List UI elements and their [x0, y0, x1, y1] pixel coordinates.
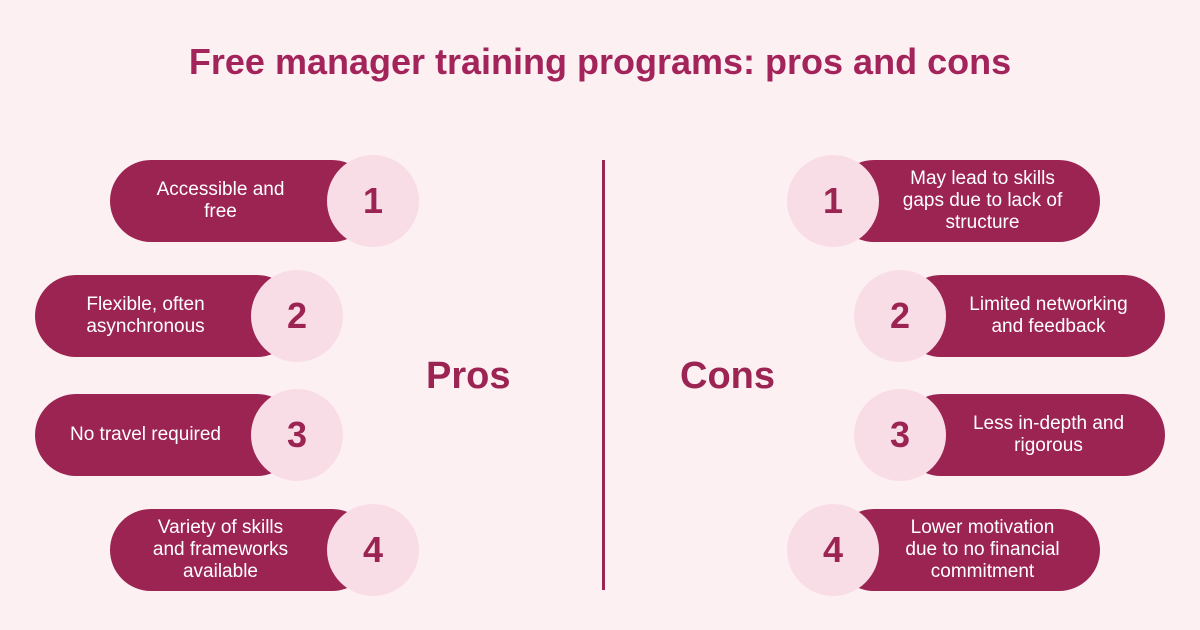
- con 3: [854, 389, 1165, 481]
- pro 1: Accessible and: [157, 179, 284, 200]
- pro 2: asynchronous: [86, 316, 205, 337]
- con 1: May lead to skills: [910, 168, 1055, 189]
- pro 2: 2: [287, 295, 307, 336]
- pro 1: 1: [363, 180, 383, 221]
- pro 4: and frameworks: [153, 539, 288, 560]
- title: Free manager training programs: pros and cons: [189, 41, 1011, 82]
- con 2: Limited networking: [969, 294, 1128, 315]
- pro 2: [35, 270, 343, 362]
- cons label: Cons: [680, 355, 775, 397]
- con 1: structure: [946, 212, 1019, 233]
- pro 2: Flexible, often: [86, 294, 205, 315]
- pro 1: [110, 155, 419, 247]
- con 1: [787, 155, 1100, 247]
- con 2: and feedback: [991, 316, 1106, 337]
- con 4: due to no financial: [905, 539, 1060, 560]
- pro 4: Variety of skills: [158, 517, 283, 538]
- con 3: Less in-depth and: [973, 413, 1124, 434]
- pro 4: [110, 504, 419, 596]
- con 2: 2: [890, 295, 910, 336]
- divider: [602, 160, 605, 590]
- con 1: 1: [823, 180, 843, 221]
- con 4: [787, 504, 1100, 596]
- pro 3: [35, 389, 343, 481]
- con 3: 3: [890, 414, 910, 455]
- con 1: gaps due to lack of: [903, 190, 1062, 211]
- pro 1: free: [204, 201, 237, 222]
- con 4: Lower motivation: [911, 517, 1054, 538]
- pro 3: 3: [287, 414, 307, 455]
- pro 4: available: [183, 561, 258, 582]
- pro 3: No travel required: [70, 424, 221, 445]
- con 4: 4: [823, 529, 843, 570]
- pros label: Pros: [426, 355, 510, 397]
- con 3: rigorous: [1014, 435, 1083, 456]
- con 2: [854, 270, 1165, 362]
- pro 4: 4: [363, 529, 383, 570]
- con 4: commitment: [931, 561, 1034, 582]
